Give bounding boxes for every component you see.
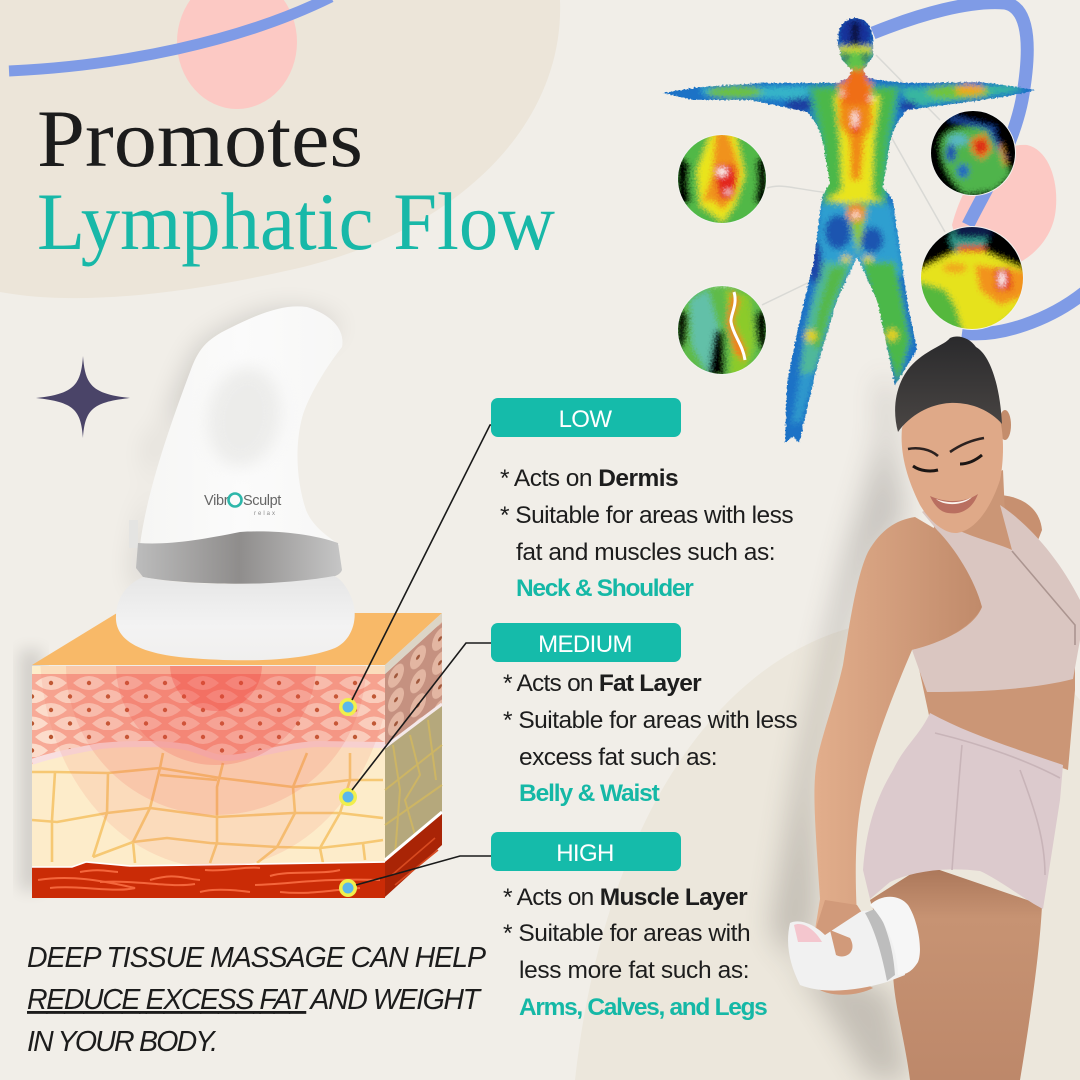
text: medium details: * Suitable for areas with less [503, 707, 797, 734]
zipper [1012, 551, 1075, 645]
fat layer [32, 746, 385, 870]
woman shadow [770, 370, 910, 1080]
right face: dermis [385, 622, 442, 747]
lower left leg [792, 372, 815, 425]
torso [808, 86, 900, 205]
badge: high: HIGH [556, 840, 614, 867]
device clip [129, 520, 138, 548]
pink blob right [952, 145, 1056, 270]
hair [895, 336, 1002, 432]
handheld device [788, 897, 920, 991]
panel: high [491, 832, 767, 1021]
caption: IN YOUR BODY. [27, 1026, 218, 1058]
eyes [913, 455, 982, 471]
forearm hand [815, 900, 870, 975]
marker: fat [339, 788, 357, 806]
device logo: Sculpt [243, 493, 281, 509]
leader line: high [356, 856, 500, 885]
woman with device [770, 336, 1080, 1080]
text: low details: * Suitable for areas with less [500, 502, 793, 529]
icon: sparkle star [36, 356, 130, 438]
text: low details [500, 465, 793, 602]
text: high details [503, 884, 767, 1021]
ear [999, 410, 1011, 440]
text: medium details: Belly & Waist [519, 780, 660, 807]
hip leg skin [870, 865, 1042, 1080]
right face: muscle [385, 814, 442, 897]
neck and torso skin [915, 470, 1075, 770]
background blob: bottom right [575, 619, 1080, 1080]
thermal body scan [655, 10, 1055, 450]
device body [140, 306, 343, 545]
text: medium details: excess fat such as: [519, 744, 717, 771]
eyebrows [908, 438, 984, 456]
device logo: Vibr [204, 493, 229, 509]
body silhouette with heat map [655, 10, 1055, 450]
marker: dermis [339, 698, 357, 716]
fat cell walls [32, 753, 383, 863]
inset circle: neck and shoulder [921, 226, 1023, 330]
badge: medium: MEDIUM [538, 631, 632, 658]
title [37, 93, 555, 267]
blue curve right [873, 3, 1080, 334]
device recess [200, 362, 288, 472]
hips [815, 205, 905, 275]
leader line: low [352, 425, 500, 700]
badge: low: LOW [559, 406, 612, 433]
device towel puff [116, 576, 355, 660]
smile [930, 494, 978, 513]
back of upper arm and shoulder [814, 517, 982, 930]
text: medium details [503, 670, 797, 807]
left leg [800, 262, 852, 375]
panel: medium [491, 623, 797, 807]
block shadow [20, 650, 42, 890]
right face: fat [385, 706, 442, 860]
background blob: top left [0, 0, 560, 298]
crop top [912, 505, 1080, 692]
caption: DEEP TISSUE MASSAGE CAN HELP [27, 942, 486, 974]
device logo [204, 493, 281, 517]
heat rings [40, 666, 385, 868]
text: high details: * Acts on Muscle Layer [503, 884, 748, 911]
marker: muscle [339, 879, 357, 897]
title line: Promotes: Promotes [37, 93, 363, 184]
massage device [116, 306, 355, 660]
top face [32, 613, 442, 665]
badge: high [491, 832, 681, 871]
arms [700, 86, 810, 100]
text: high details: Arms, Calves, and Legs [519, 994, 767, 1021]
panel: low [491, 398, 793, 602]
right leg [862, 262, 910, 385]
connector lines [762, 55, 945, 305]
text: high details: * Suitable for areas with [503, 920, 750, 947]
device logo: relax [254, 511, 277, 517]
text: low details: fat and muscles such as: [516, 539, 775, 566]
fingers [830, 930, 852, 956]
inset circle: thigh [678, 286, 766, 374]
leader line: medium [352, 643, 500, 790]
front face [32, 666, 385, 898]
text: low details: * Acts on Dermis [500, 465, 678, 492]
title line: Lymphatic Flow: Lymphatic Flow [37, 176, 555, 267]
device shadow [135, 312, 340, 590]
blue curve top left [9, 0, 331, 71]
head [838, 16, 872, 52]
inset circle: lower back [678, 135, 766, 223]
muscle fibers [38, 868, 380, 893]
muscle layer [32, 862, 385, 898]
device silver band [136, 531, 342, 584]
shorts [863, 713, 1063, 909]
text: high details: less more fat such as: [519, 957, 749, 984]
badge: medium [491, 623, 681, 662]
badge: low [491, 398, 681, 437]
text: low details: Neck & Shoulder [516, 575, 694, 602]
text: medium details: * Acts on Fat Layer [503, 670, 702, 697]
caption [27, 942, 486, 1058]
inset circle: face [931, 111, 1016, 196]
far shoulder [1000, 495, 1042, 548]
skin layers diagram [20, 432, 442, 898]
pink circle top [177, 0, 297, 109]
caption: REDUCE EXCESS FAT AND WEIGHT [27, 984, 483, 1016]
face [902, 402, 1003, 533]
